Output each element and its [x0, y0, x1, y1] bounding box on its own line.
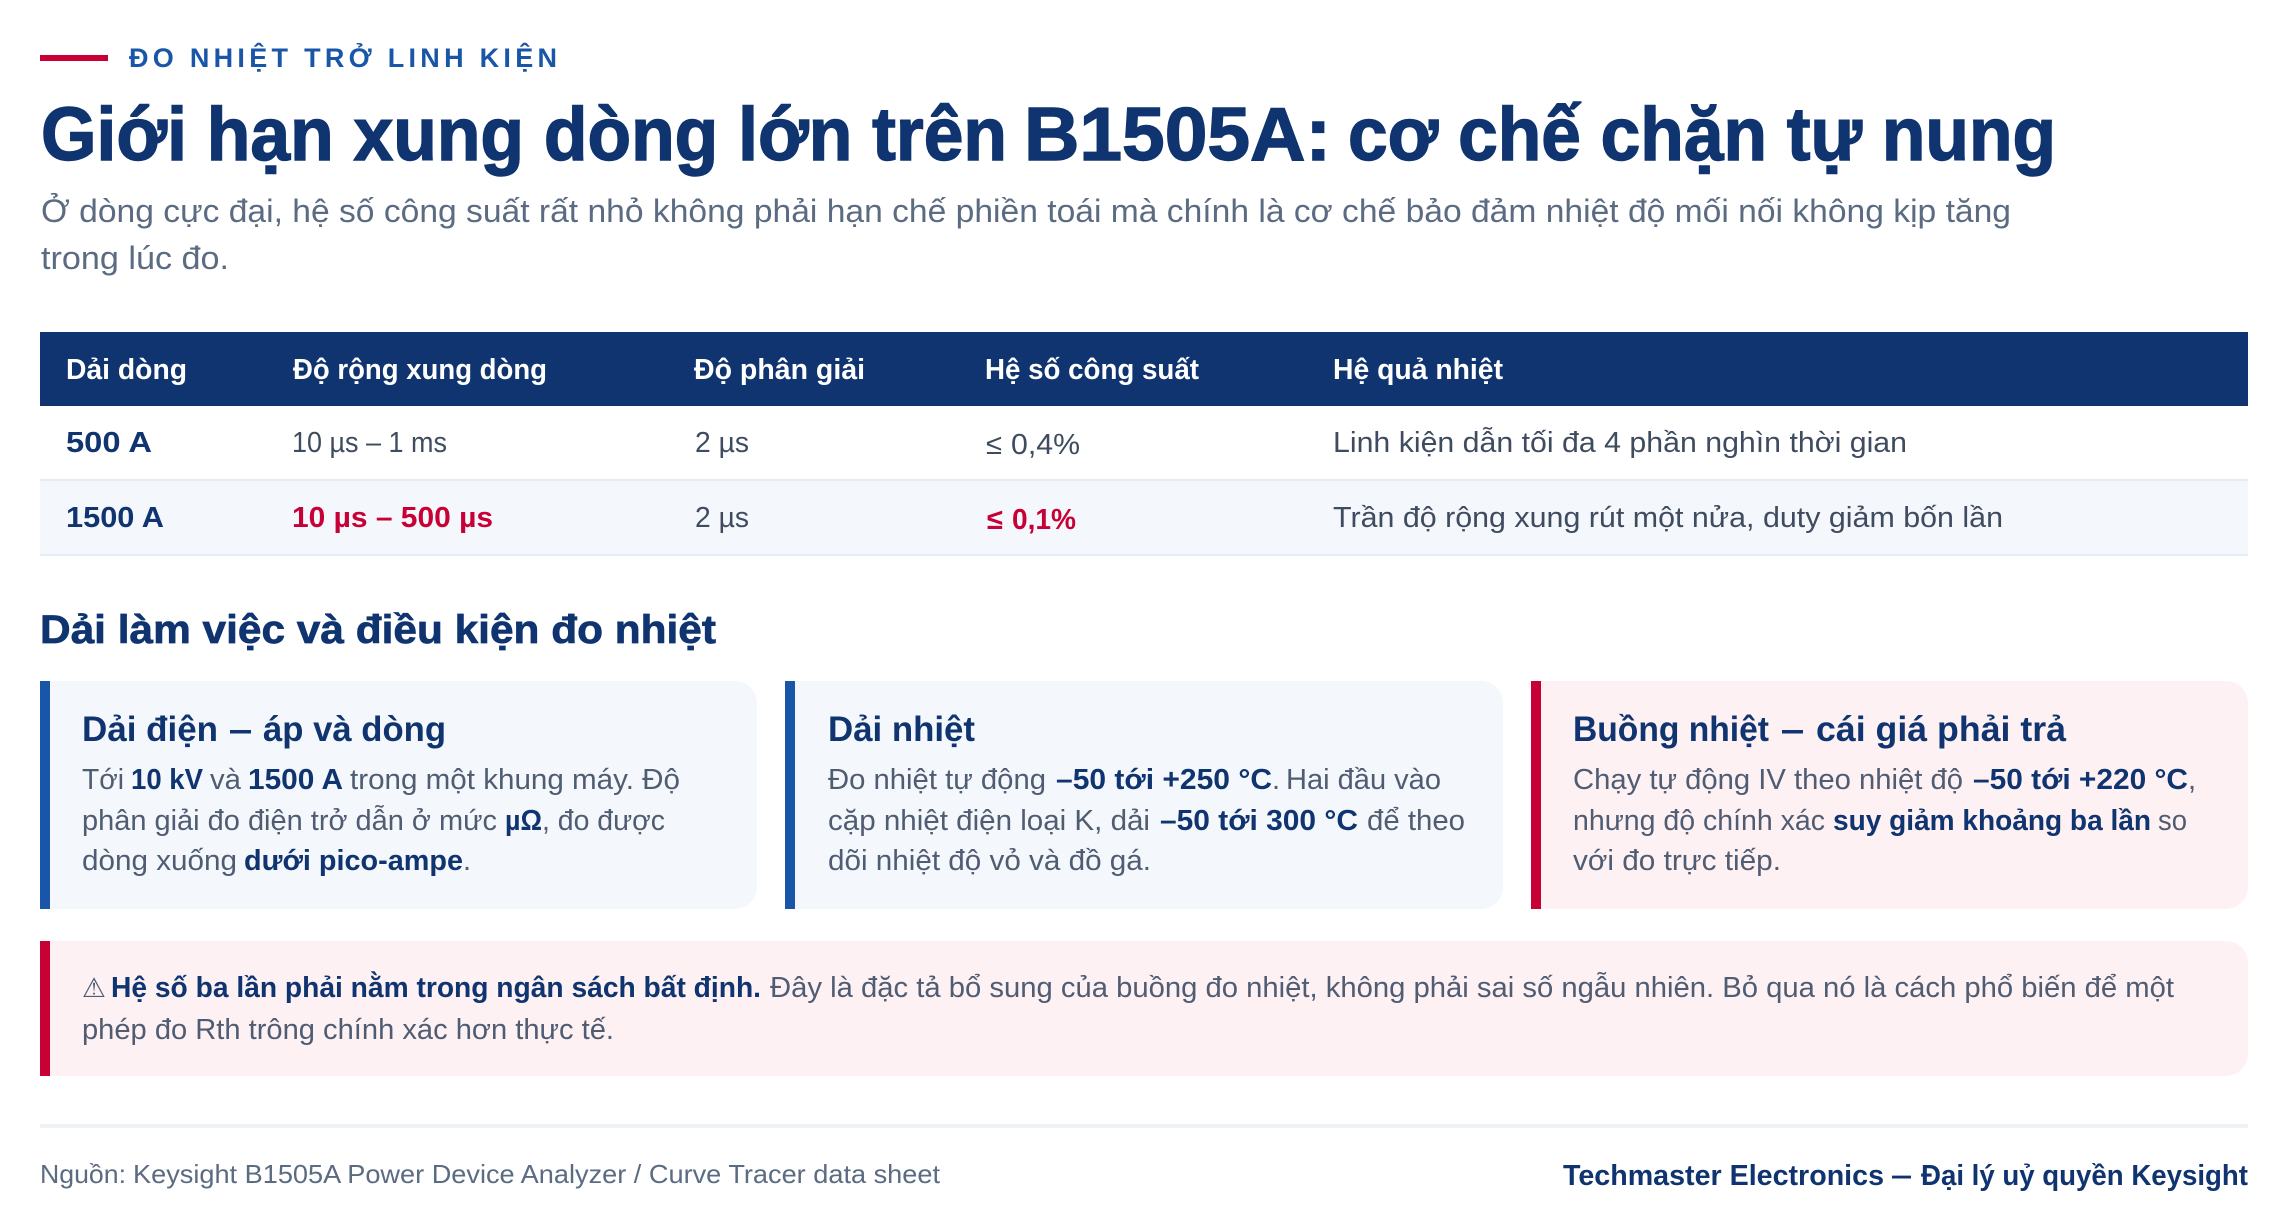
panel: thermal range [785, 681, 1503, 909]
footer: brand: — [1892, 1160, 1911, 1192]
panel: thermal range: Đo nhiệt tự động [828, 764, 1046, 796]
footer: brand [1563, 1160, 2248, 1192]
panel: electrical range: Tới [82, 764, 124, 796]
callout: Đây là đặc tả bổ sung của buồng đo nhiệt, không phải sai số ngẫu nhiên. Bỏ qua nó là cách phổ biến để một [770, 971, 2174, 1004]
table row: 1500 A: ≤ [987, 504, 1003, 536]
panel: thermal chamber: Chạy tự động IV theo nhiệt độ [1573, 764, 1963, 796]
title: cơ chế chặn tự nung [1348, 92, 2056, 176]
panel: thermal range: Hai đầu vào [1286, 764, 1441, 796]
table row: 1500 A [40, 481, 2248, 556]
panel: electrical range: dòng xuống [82, 845, 237, 877]
panel: thermal chamber: , [2188, 764, 2196, 796]
title [41, 92, 2056, 176]
panel: thermal chamber: với đo trực tiếp. [1573, 845, 1781, 877]
icon: warning: ⚠ [82, 973, 106, 1004]
section heading: Dải làm việc và điều kiện đo nhiệt [40, 608, 716, 652]
panel: electrical range [40, 681, 757, 909]
panel: electrical range: µΩ [505, 805, 542, 837]
table row: 1500 A: 2 µs [695, 502, 749, 534]
table header: Hệ quả nhiệt [1333, 354, 1503, 386]
panel: thermal chamber: nhưng độ chính xác [1573, 805, 1825, 837]
title: Giới hạn xung dòng lớn trên [41, 92, 1007, 176]
table row: 1500 A: 0,1% [1012, 504, 1076, 536]
footer: brand: Đại lý uỷ quyền Keysight [1921, 1160, 2248, 1192]
panel: electrical range: dưới pico-ampe [244, 845, 463, 877]
subtitle: trong lúc đo. [41, 240, 229, 276]
panel: electrical range: , đo được [542, 805, 665, 837]
panel: thermal range: để theo [1367, 805, 1465, 837]
panel: thermal range: dõi nhiệt độ vỏ và đồ gá. [828, 845, 1151, 877]
subtitle: Ở dòng cực đại, hệ số công suất rất nhỏ không phải hạn chế phiền toái mà chính là cơ chế bảo đảm nhiệt độ mối nối không kịp tăng [41, 193, 2011, 229]
panel: electrical range: và [210, 764, 242, 796]
panel: electrical range: . [463, 845, 471, 877]
table row: 500 A: 500 A [66, 427, 152, 459]
footer: source: Nguồn: [40, 1159, 126, 1189]
table row: 500 A: 2 µs [695, 427, 749, 459]
callout: Hệ số ba lần phải nằm trong ngân sách bất định. [111, 970, 761, 1004]
eyebrow: ĐO NHIỆT TRỞ LINH KIỆN [129, 41, 557, 73]
panel: electrical range: 10 kV [131, 764, 204, 796]
table row: 500 A: 10 µs – 1 ms [292, 427, 447, 459]
table [40, 332, 2248, 556]
footer: source: Keysight B1505A Power Device Analyzer / Curve Tracer data sheet [133, 1159, 941, 1189]
panel: electrical range: 1500 A [248, 764, 343, 796]
table header: Độ phân giải [694, 354, 865, 386]
panel: thermal range: cặp nhiệt điện loại K, dải [828, 805, 1150, 837]
panel: thermal chamber: suy giảm khoảng ba lần [1833, 805, 2151, 837]
panel: thermal range: –50 tới +250 °C [1056, 764, 1272, 796]
panel: electrical range: phân giải đo điện trở dẫn ở mức [82, 804, 497, 837]
panel: thermal chamber [1531, 681, 2248, 909]
panel: thermal chamber: so [2158, 805, 2187, 837]
table header [40, 332, 2248, 406]
table row: 1500 A: 1500 A [66, 502, 164, 534]
panel: thermal chamber: cái giá phải trả [1816, 710, 2067, 749]
panel: thermal chamber: –50 tới +220 °C [1973, 764, 2188, 796]
table row: 500 A [40, 426, 2248, 481]
panel: electrical range: trong một khung máy. Độ [350, 764, 680, 796]
panel: electrical range: — [230, 710, 251, 749]
panel: thermal chamber: — [1782, 710, 1803, 749]
table row: 500 A: 0,4% [1011, 429, 1080, 461]
subtitle [41, 193, 2011, 276]
title: B1505A: [1024, 92, 1331, 176]
table row: 500 A: ≤ [986, 429, 1002, 461]
table row: 500 A: Linh kiện dẫn tối đa 4 phần nghìn thời gian [1333, 426, 1907, 459]
table header: Dải dòng [66, 354, 187, 386]
panel: electrical range: áp và dòng [263, 710, 446, 749]
callout: phép đo Rth trông chính xác hơn thực tế. [82, 1014, 614, 1046]
table row: 1500 A: Trần độ rộng xung rút một nửa, duty giảm bốn lần [1333, 502, 2003, 534]
panel: thermal range: Dải nhiệt [828, 710, 975, 749]
table header: Hệ số công suất [985, 354, 1199, 386]
callout [40, 941, 2248, 1076]
panel: thermal range: . [1272, 764, 1280, 796]
table header: Độ rộng xung dòng [293, 354, 547, 386]
panel: thermal range: –50 tới 300 °C [1160, 805, 1358, 837]
table row: 1500 A: 10 µs – 500 µs [292, 502, 493, 534]
panel: thermal chamber: Buồng nhiệt [1573, 710, 1769, 749]
footer: brand: Techmaster Electronics [1563, 1160, 1884, 1192]
panel: electrical range: Dải điện [82, 710, 218, 749]
